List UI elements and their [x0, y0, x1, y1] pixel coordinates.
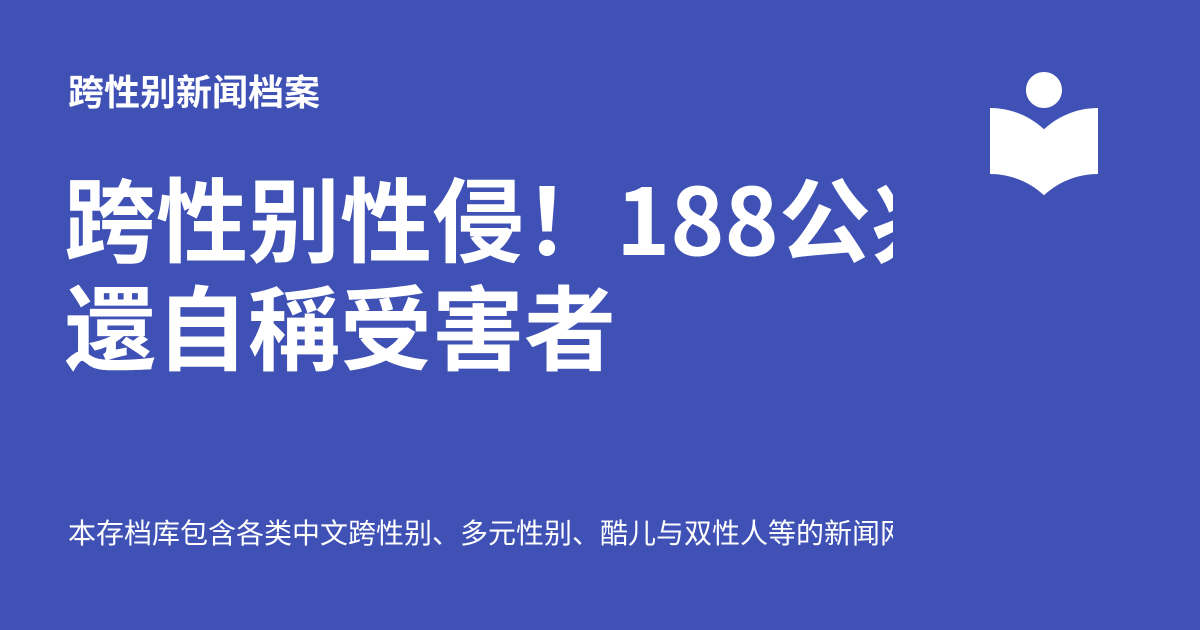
icon: reading book	[990, 72, 1098, 196]
heading: site name: 跨性别新闻档案	[68, 64, 320, 116]
title	[64, 162, 893, 378]
